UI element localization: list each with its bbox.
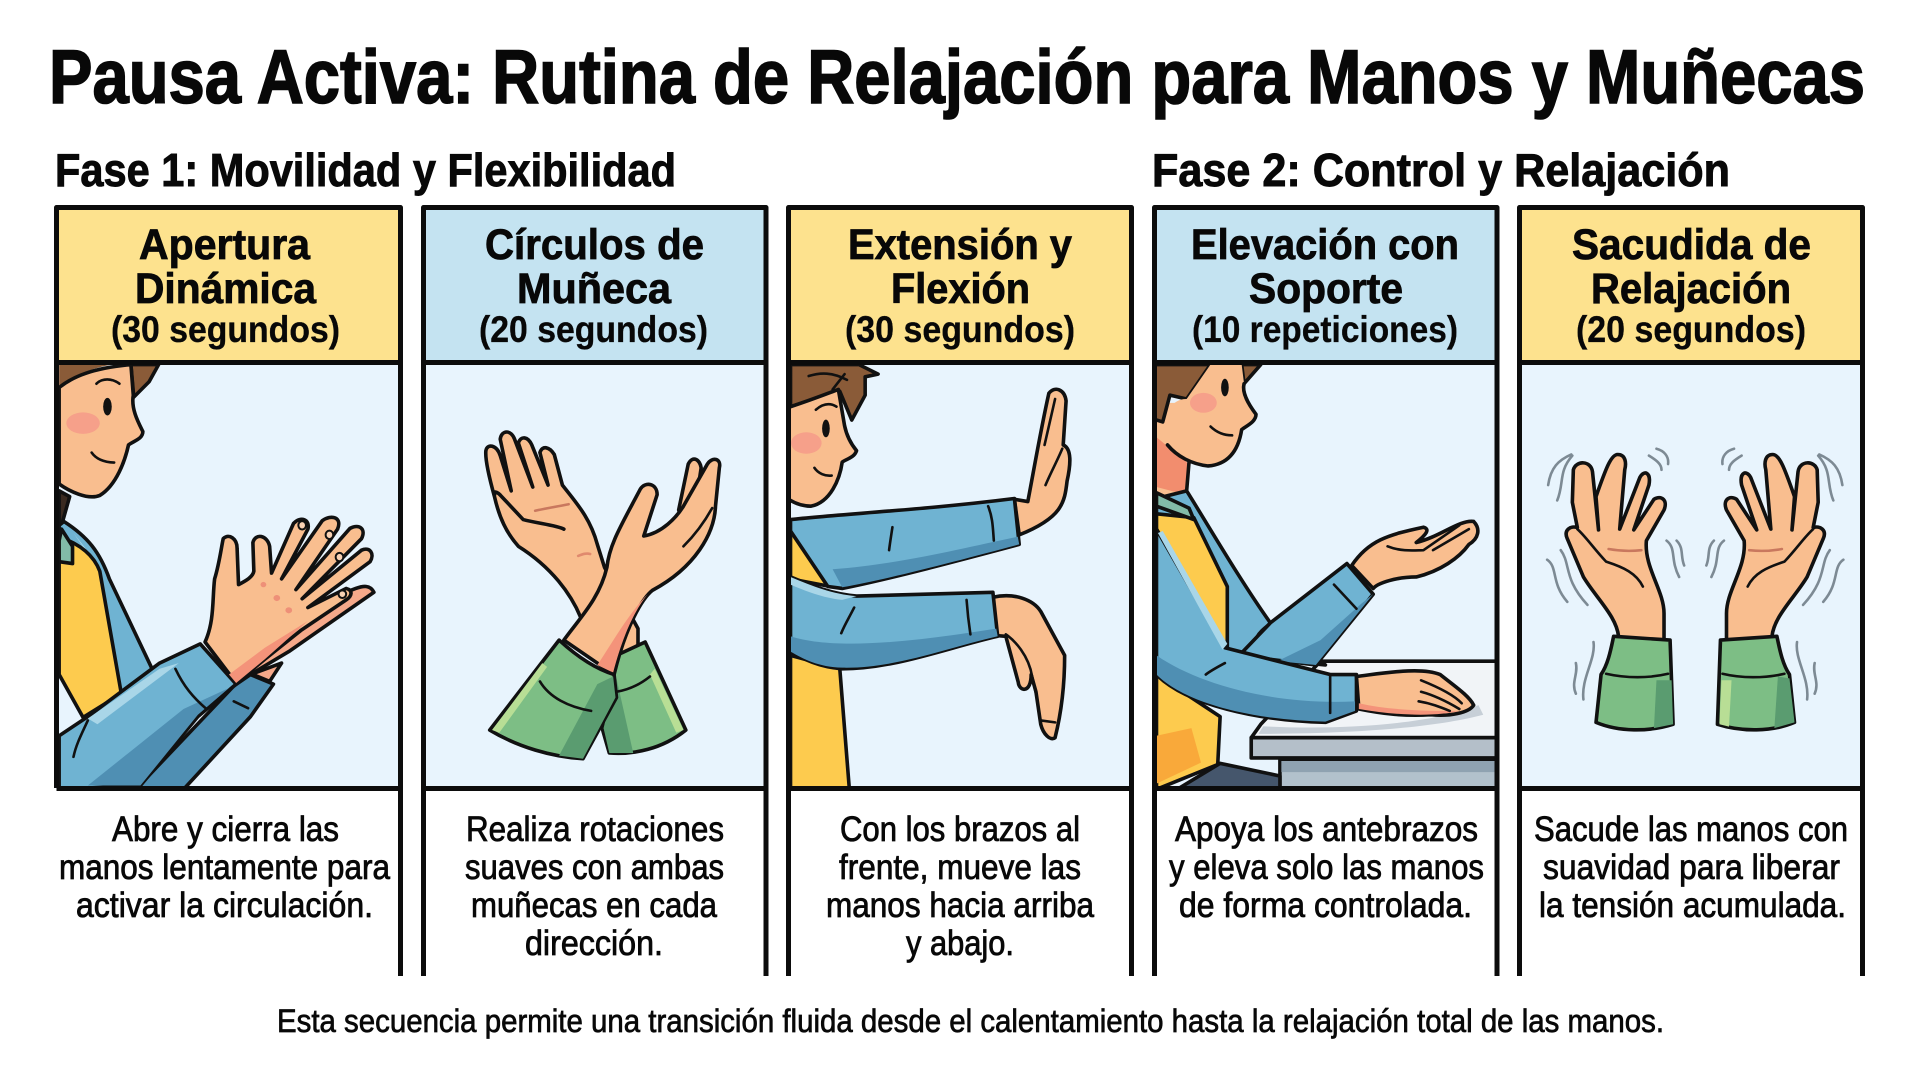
- panel header: Relajación: [1591, 265, 1791, 313]
- panel header: [423, 207, 767, 363]
- panel header: [56, 207, 401, 363]
- panel caption: de forma controlada.: [1179, 886, 1472, 925]
- panel header: Flexión: [891, 265, 1030, 313]
- hand: left: [1547, 449, 1684, 730]
- panel caption: activar la circulación.: [76, 886, 373, 925]
- panel: sacudida de relajación: [1517, 205, 1865, 976]
- panel caption: Realiza rotaciones: [466, 810, 724, 849]
- illustration: brazo apoyado en la mesa y mano elevada: [1151, 365, 1498, 789]
- panel header: (20 segundos): [1576, 309, 1806, 350]
- panel header: (20 segundos): [479, 309, 708, 350]
- panel caption: [826, 810, 1094, 963]
- panel caption: frente, mueve las: [839, 848, 1081, 887]
- panel caption: dirección.: [525, 924, 663, 963]
- panel: extensión y flexión: [786, 205, 1134, 976]
- panel caption: y abajo.: [906, 924, 1014, 963]
- panel header: Apertura: [139, 221, 311, 269]
- panel header: Círculos de: [485, 221, 704, 269]
- panel header: Muñeca: [517, 265, 672, 313]
- panel header: Sacudida de: [1572, 221, 1811, 269]
- panel: círculos de muñeca: [421, 205, 768, 976]
- hand: right: [1706, 449, 1843, 730]
- illustration: manos sacudiéndose: [1547, 449, 1843, 730]
- panel caption: suavidad para liberar: [1543, 848, 1840, 887]
- panel caption: Con los brazos al: [840, 810, 1080, 849]
- panel header: [788, 207, 1132, 363]
- panel frame: [1520, 208, 1862, 976]
- panel caption: Abre y cierra las: [112, 810, 339, 849]
- panel header: [1519, 207, 1863, 363]
- panel header: [1154, 207, 1498, 363]
- panel header: (10 repeticiones): [1192, 309, 1458, 350]
- panel: apertura dinámica: [54, 205, 403, 976]
- panel header: Elevación con: [1191, 221, 1459, 269]
- panel header: Dinámica: [135, 265, 317, 313]
- table: [1251, 661, 1498, 789]
- panel frame: [1154, 208, 1497, 976]
- panel: elevación con soporte: [1152, 205, 1500, 976]
- illustration: manos cruzadas girando: [486, 432, 720, 759]
- panel header: Extensión y: [848, 221, 1072, 269]
- illustration: brazos extendidos con flexión: [785, 365, 1070, 789]
- panel caption: [1534, 810, 1848, 925]
- panel caption: [1169, 810, 1484, 925]
- panel caption: suaves con ambas: [465, 848, 724, 887]
- panel header: (30 segundos): [845, 309, 1075, 350]
- panel caption: manos hacia arriba: [826, 886, 1094, 925]
- panel caption: muñecas en cada: [471, 886, 717, 925]
- panel caption: [59, 810, 390, 925]
- panel frame: [788, 208, 1132, 976]
- panel frame: [56, 208, 400, 976]
- panel header: (30 segundos): [111, 309, 340, 350]
- panel frame: [424, 208, 766, 976]
- panel header: Soporte: [1249, 265, 1403, 313]
- panel caption: [465, 810, 724, 963]
- illustration: persona juntando las manos: [59, 365, 374, 789]
